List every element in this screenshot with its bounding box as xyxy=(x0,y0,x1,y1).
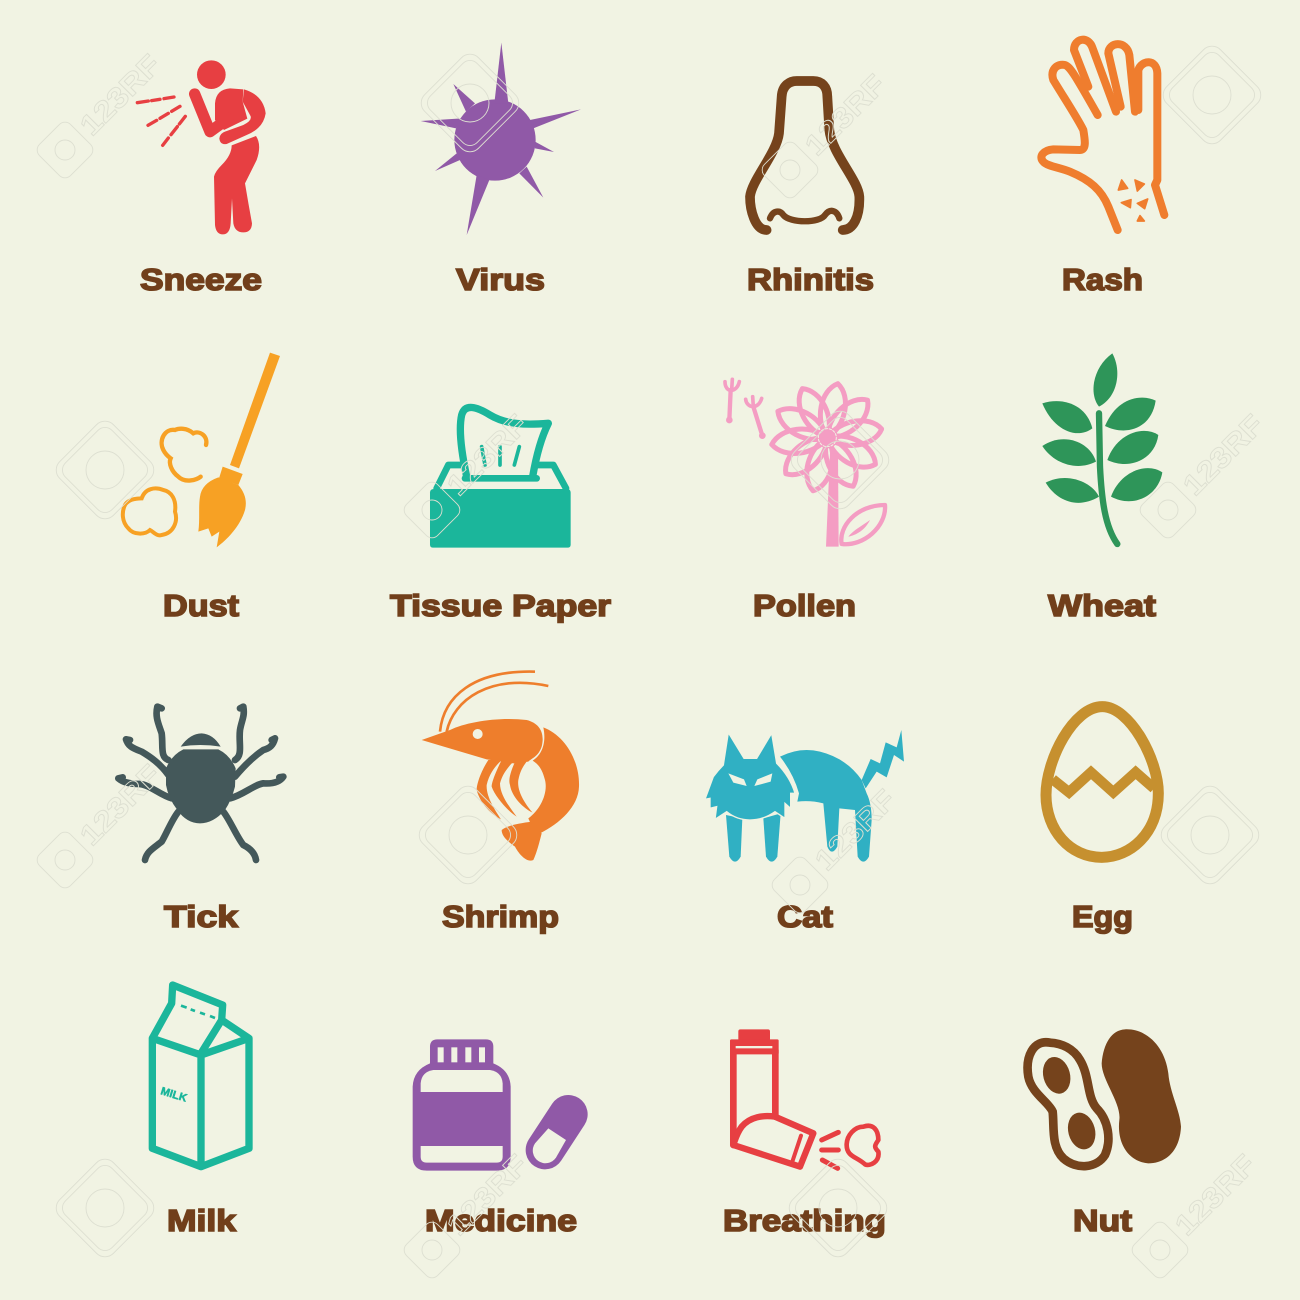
icon: cracked egg xyxy=(1046,707,1158,857)
label: Medicine: Medicine xyxy=(425,1203,577,1238)
label: Shrimp: Shrimp xyxy=(442,899,559,934)
watermarks: 123RF xyxy=(441,1149,535,1242)
label: Pollen: Pollen xyxy=(753,588,856,623)
label: Rhinitis: Rhinitis xyxy=(747,262,874,297)
icon: sneezing person xyxy=(137,60,266,234)
label: Milk: Milk xyxy=(167,1203,237,1238)
icon: inhaler xyxy=(730,1029,879,1168)
label: Virus: Virus xyxy=(456,262,545,297)
icon: wheat leaves xyxy=(1042,353,1162,544)
label: Breathing: Breathing xyxy=(723,1203,886,1238)
icon: virus xyxy=(421,43,581,235)
icon: hand with rash xyxy=(1041,40,1164,230)
icon: tissue box xyxy=(430,407,571,548)
watermarks: 123RF xyxy=(809,784,903,877)
icon: angry cat xyxy=(705,730,904,862)
label: Dust: Dust xyxy=(163,588,239,623)
watermarks: 123RF xyxy=(441,409,535,502)
label: Cat: Cat xyxy=(777,899,833,934)
icon: milk carton xyxy=(152,985,249,1167)
icon: medicine jar and capsule xyxy=(413,1039,568,1171)
watermarks: 123RF xyxy=(1169,1149,1263,1242)
label: Wheat: Wheat xyxy=(1048,588,1156,623)
icon: peanut xyxy=(1028,1029,1181,1166)
icon: broom and dust clouds xyxy=(123,353,280,547)
label: Nut: Nut xyxy=(1073,1203,1132,1238)
label: Tissue Paper: Tissue Paper xyxy=(390,588,611,623)
icon: flower with pollen xyxy=(725,379,885,547)
label: Rash: Rash xyxy=(1062,262,1143,297)
label: Egg: Egg xyxy=(1072,899,1133,934)
label: Sneeze: Sneeze xyxy=(140,262,262,297)
icon: shrimp xyxy=(422,672,579,861)
icon: milk carton: MILK xyxy=(159,1085,188,1105)
watermarks: 123RF xyxy=(799,69,893,162)
icon: tick xyxy=(118,707,283,860)
label: Tick: Tick xyxy=(164,899,239,934)
icon: nose xyxy=(750,81,859,230)
watermarks: 123RF xyxy=(1177,409,1271,502)
watermarks: 123RF xyxy=(74,759,168,852)
watermarks: 123RF xyxy=(74,49,168,142)
